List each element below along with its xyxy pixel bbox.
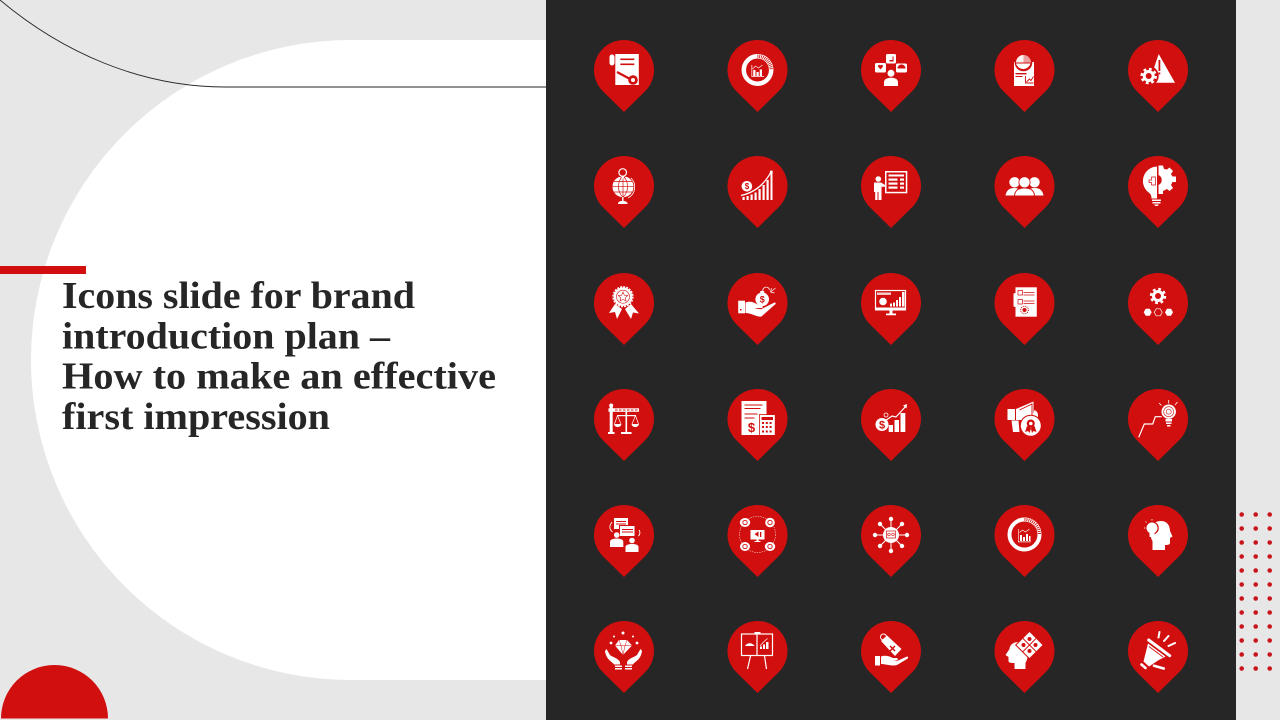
icon: growth chart with dollar <box>728 156 788 228</box>
icon: hand with price tag <box>861 621 921 693</box>
title: Icons slide for brand <box>62 275 415 317</box>
icon: hand holding dollar bomb: $ <box>760 294 765 304</box>
icon: money bag with rising bars <box>861 389 921 461</box>
red title bar <box>0 266 86 274</box>
icon: ledger with calculator <box>728 389 788 461</box>
title: How to make an effective <box>62 356 496 398</box>
dark panel background <box>546 0 1236 720</box>
icon: light bulb with gear <box>1128 156 1188 228</box>
icon: award rosette <box>594 273 654 345</box>
curved line <box>0 0 546 87</box>
icon: two people in conversation <box>594 505 654 577</box>
icon: growth chart with dollar: $ <box>745 182 750 191</box>
icon: gear over hexagons <box>1128 273 1188 345</box>
icon: monitor with linked circles <box>728 505 788 577</box>
icon: presenter with board <box>861 156 921 228</box>
icon: head with decision grid <box>994 621 1054 693</box>
title: introduction plan – <box>62 316 391 358</box>
icon: growth path to light bulb <box>1128 389 1188 461</box>
icon: head with light bulb <box>1128 505 1188 577</box>
icon: hand holding dollar bomb <box>728 273 788 345</box>
white rounded panel <box>31 40 546 680</box>
title <box>62 275 496 438</box>
icon: presentation board <box>728 621 788 693</box>
icon: checklist document with gear <box>994 273 1054 345</box>
icon: money bag with rising bars: $ <box>879 420 885 432</box>
panel: icon grid <box>546 0 1236 720</box>
decorative dot grid <box>1239 512 1272 671</box>
icon: barrier with scales of justice <box>594 389 654 461</box>
icon: key document <box>594 40 654 112</box>
icon: megaphone with sound rays <box>1128 621 1188 693</box>
icon: globe with location pin <box>594 156 654 228</box>
icon: monitor with charts <box>861 273 921 345</box>
icon: large donut chart <box>994 505 1054 577</box>
icon: group of three people <box>994 156 1054 228</box>
icon: donut chart <box>728 40 788 112</box>
icon: network hub <box>861 505 921 577</box>
icon: pie chart on document <box>994 40 1054 112</box>
title: first impression <box>62 396 330 438</box>
icon: ledger with calculator: $ <box>748 420 756 435</box>
icon: warning triangle with gear <box>1128 40 1188 112</box>
icon: hands holding diamond <box>594 621 654 693</box>
icon: megaphone with badge <box>994 389 1054 461</box>
icon: person with interest bubbles <box>861 40 921 112</box>
semicircle accent <box>1 665 108 718</box>
